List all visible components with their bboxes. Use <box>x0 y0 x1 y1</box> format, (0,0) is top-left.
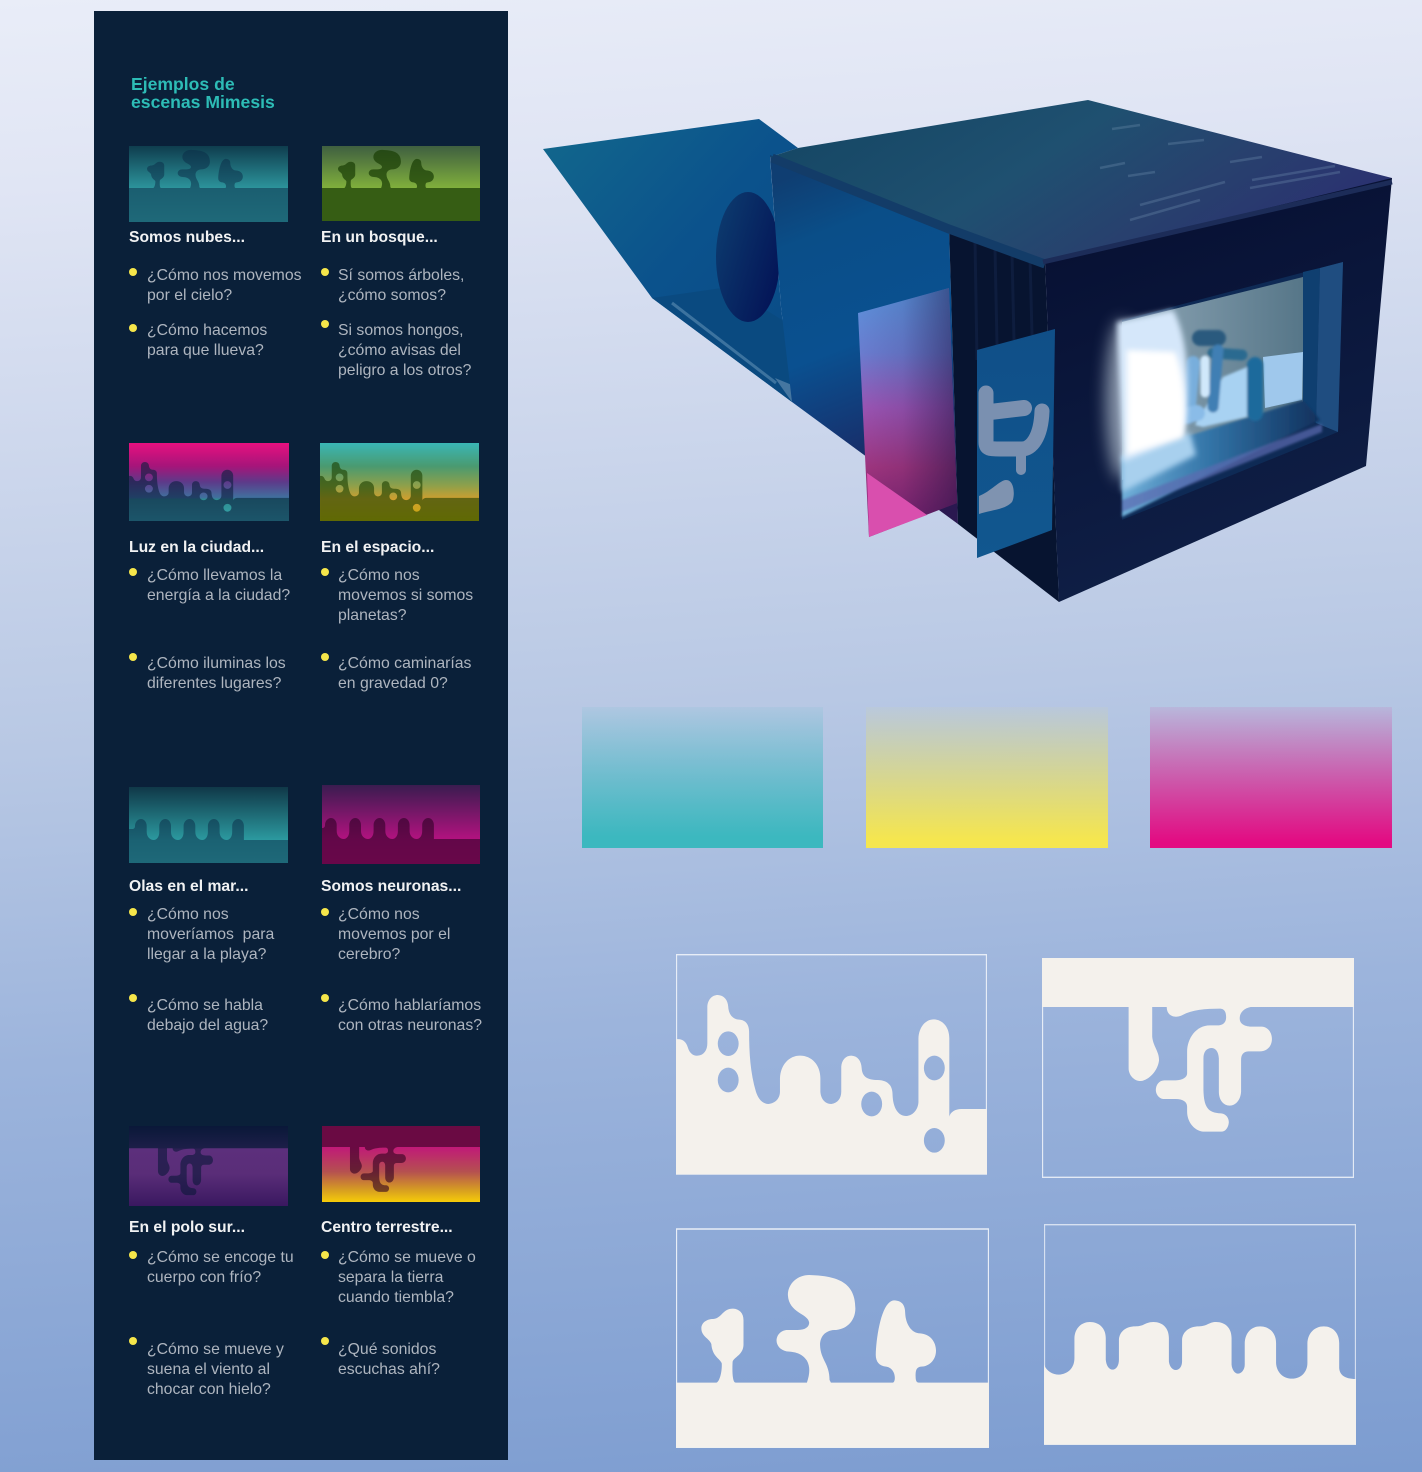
scene thumbnail: centro terrestre <box>322 1126 480 1202</box>
panel title: Ejemplos de <box>131 74 235 94</box>
side plate <box>770 155 958 524</box>
bullet question: ¿Cómo se mueve y <box>147 1341 284 1358</box>
projected root shape <box>1167 338 1255 427</box>
stencil: waves <box>1044 1224 1356 1445</box>
bullet question: ¿cómo avisas del <box>338 342 461 359</box>
bullet question: ¿Cómo nos movemos <box>147 267 302 284</box>
screen light area <box>1263 352 1303 408</box>
swatch: magenta gradient <box>1150 707 1392 848</box>
bullet question: ¿Cómo nos <box>338 906 420 923</box>
bullet question <box>321 653 471 692</box>
scene thumbnail: espacio <box>320 443 479 521</box>
card: Somos nubes <box>129 146 302 359</box>
bullet question: ¿Cómo nos <box>338 567 420 584</box>
bullet question <box>129 653 286 692</box>
bullet question <box>129 906 274 963</box>
bullet question: cuerpo con frío? <box>147 1269 261 1286</box>
bright light <box>1117 310 1196 492</box>
scene thumbnail: neuronas <box>322 785 480 864</box>
stencil: roots <box>1042 958 1354 1178</box>
bullet question <box>129 994 268 1034</box>
bullet question: Sí somos árboles, <box>338 267 464 284</box>
card: Centro terrestre <box>321 1126 480 1378</box>
bullet question: separa la tierra <box>338 1269 443 1286</box>
bullet question: ¿Cómo caminarías <box>338 655 471 672</box>
card: Somos neuronas <box>321 785 482 1034</box>
bullet question: en gravedad 0? <box>338 675 448 692</box>
bullet question: planetas? <box>338 607 407 624</box>
bullet question: ¿Qué sonidos <box>338 1341 436 1358</box>
panel title <box>131 74 275 112</box>
top face <box>770 100 1392 264</box>
pink slide <box>858 288 957 537</box>
bullet question: chocar con hielo? <box>147 1381 271 1398</box>
scene thumbnail: ciudad <box>129 443 289 521</box>
bullet question: energía a la ciudad? <box>147 587 290 604</box>
bullet question <box>321 994 482 1034</box>
front face <box>1045 178 1392 602</box>
screen base <box>1122 277 1303 480</box>
window frame <box>1122 262 1343 520</box>
bullet question: ¿Cómo se habla <box>147 997 263 1014</box>
middle strip <box>949 227 1059 602</box>
bullet question: suena el viento al <box>147 1361 270 1378</box>
bullet question <box>321 567 473 624</box>
bullet question <box>321 320 471 379</box>
card: En el espacio <box>320 443 479 692</box>
panel: ejemplos de escenas <box>94 11 508 1460</box>
scene heading: En un bosque... <box>321 229 438 246</box>
bullet question <box>129 267 302 304</box>
bullet question: debajo del agua? <box>147 1017 268 1034</box>
bullet question: ¿Cómo nos <box>147 906 229 923</box>
bullet question: Si somos hongos, <box>338 322 464 339</box>
bullet question: movemos si somos <box>338 587 473 604</box>
front top edge <box>1043 182 1392 262</box>
card: En un bosque <box>321 146 480 379</box>
lens <box>716 192 780 322</box>
scene heading: Somos neuronas... <box>321 878 461 895</box>
scene heading: Centro terrestre... <box>321 1219 453 1236</box>
bullet question: cerebro? <box>338 946 400 963</box>
scene heading: En el polo sur... <box>129 1219 245 1236</box>
screen lower blue <box>1122 400 1322 517</box>
swatch: yellow gradient <box>866 707 1108 848</box>
scene thumbnail: nubes <box>129 146 288 222</box>
scene heading: Somos nubes... <box>129 229 245 246</box>
bullet question: ¿cómo somos? <box>338 287 446 304</box>
blue slide <box>977 329 1055 558</box>
mirror flap <box>543 119 798 402</box>
bullet question <box>129 567 290 604</box>
card: Luz en la ciudad <box>129 443 290 692</box>
bullet question: ¿Cómo se encoge tu <box>147 1249 294 1266</box>
card: Olas en el mar <box>129 787 288 1034</box>
bullet question <box>129 1337 284 1398</box>
scene thumbnail: bosque <box>322 146 480 221</box>
bullet question: ¿Cómo iluminas los <box>147 655 286 672</box>
scene heading: Luz en la ciudad... <box>129 539 264 556</box>
window right bars <box>1303 262 1343 432</box>
bullet question <box>321 1249 476 1306</box>
bullet question: ¿Cómo hablaríamos <box>338 997 481 1014</box>
panel title: escenas Mimesis <box>131 92 275 112</box>
bullet question: por el cielo? <box>147 287 232 304</box>
bullet question: ¿Cómo llevamos la <box>147 567 282 584</box>
bullet question: llegar a la playa? <box>147 946 266 963</box>
bullet question <box>129 322 267 359</box>
bullet question <box>321 906 450 963</box>
illustration: projector box <box>543 100 1392 602</box>
scene thumbnail: olas <box>129 787 288 863</box>
bullet question: escuchas ahí? <box>338 1361 440 1378</box>
bullet question: diferentes lugares? <box>147 675 281 692</box>
bullet question <box>129 1249 294 1286</box>
bullet question: moveríamos para <box>147 926 274 943</box>
stencil: trees <box>676 1228 989 1448</box>
bullet question: cuando tiembla? <box>338 1289 454 1306</box>
tray <box>652 287 792 402</box>
bullet question: movemos por el <box>338 926 450 943</box>
bullet question: ¿Cómo hacemos <box>147 322 267 339</box>
screen glow <box>1106 320 1138 480</box>
card: En el polo sur <box>129 1136 294 1398</box>
bullet question: con otras neuronas? <box>338 1017 482 1034</box>
bullet question: para que llueva? <box>147 342 264 359</box>
scene heading: En el espacio... <box>321 539 434 556</box>
bullet question <box>321 267 464 304</box>
stencil: city <box>676 954 987 1175</box>
scene thumbnail: polo sur <box>129 1136 288 1206</box>
scene heading: Olas en el mar... <box>129 878 248 895</box>
bullet question: peligro a los otros? <box>338 362 471 379</box>
swatch: teal gradient <box>582 707 823 848</box>
bullet question <box>321 1337 440 1378</box>
bullet question: ¿Cómo se mueve o <box>338 1249 476 1266</box>
